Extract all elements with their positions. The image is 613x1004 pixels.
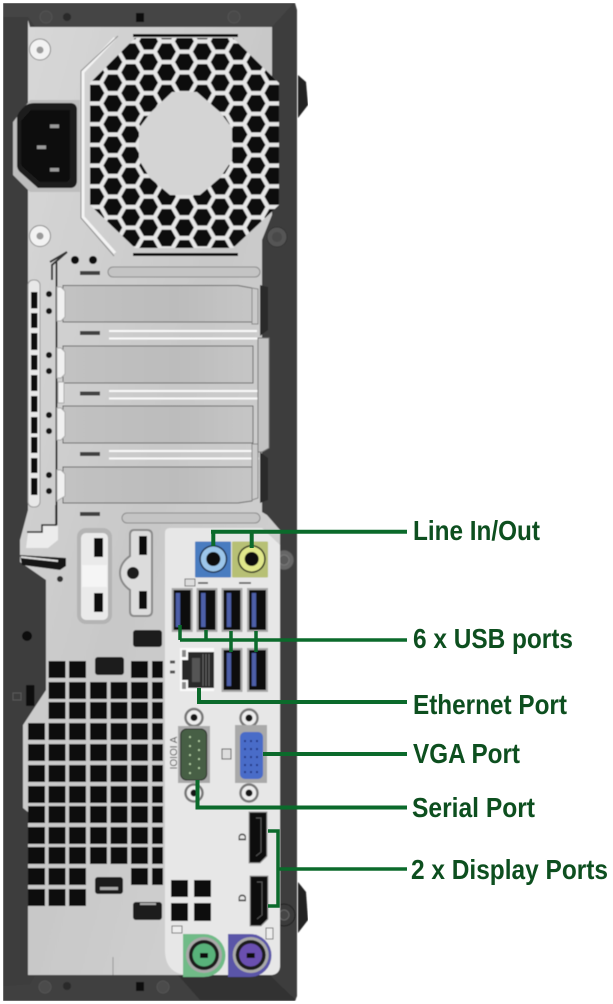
latch bottom step — [27, 505, 56, 532]
right side knob lower — [298, 882, 308, 933]
bay dividers — [109, 331, 259, 458]
display port lower — [237, 876, 268, 926]
computer chassis — [3, 3, 308, 1001]
rail slots — [31, 292, 38, 495]
right bracket dark ends — [260, 285, 268, 503]
rail vertical — [56, 262, 58, 525]
PS/2 green port — [172, 926, 226, 977]
bay 3 — [63, 406, 253, 443]
ethernet port — [170, 648, 214, 691]
bottom band fasteners — [39, 957, 296, 1000]
opening left — [77, 528, 112, 624]
bottom band — [3, 975, 200, 1000]
DP icon upper: D — [237, 833, 249, 841]
dark screw middle — [274, 550, 294, 570]
serial label: IOIOI A — [169, 736, 180, 769]
USB ports bottom row — [222, 649, 267, 691]
fan hub — [139, 92, 232, 195]
serial port — [169, 709, 210, 802]
expansion slot latch holes — [71, 256, 97, 264]
VGA icon — [222, 749, 231, 759]
callout: ethernet — [199, 688, 567, 720]
dark screw lower — [273, 904, 295, 926]
callout: USB ports: 6 x USB ports — [413, 623, 573, 654]
fan frame ridge — [83, 38, 115, 253]
ventilation grid — [28, 661, 163, 906]
side hook — [20, 555, 66, 582]
USB ports top row — [173, 589, 267, 631]
right bracket bar — [258, 338, 269, 452]
right bracket — [252, 288, 258, 500]
lower rail plate — [26, 526, 58, 548]
screw top — [30, 39, 50, 60]
metal back panel — [20, 20, 280, 975]
dark screw upper — [267, 227, 287, 247]
fan grille — [81, 36, 279, 256]
callout: ethernet: Ethernet Port — [413, 689, 567, 720]
display port upper — [237, 812, 267, 863]
audio green jack — [232, 542, 268, 578]
VGA port — [222, 710, 267, 802]
opening keyhole — [120, 530, 152, 616]
callout: display ports — [268, 831, 608, 906]
PS/2 purple port — [228, 928, 273, 977]
right side knob upper — [298, 75, 308, 118]
callout: USB ports — [180, 623, 573, 654]
callout: VGA: VGA Port — [413, 738, 520, 769]
DP icon lower: D — [237, 894, 249, 902]
small tabs — [80, 273, 100, 514]
bay 1 — [63, 286, 252, 322]
four square vents — [171, 880, 211, 921]
chassis dark body — [3, 3, 297, 1001]
callout: serial: Serial Port — [412, 792, 535, 823]
lock slot — [13, 685, 34, 706]
callout: line in/out — [211, 515, 540, 548]
white tabs — [57, 287, 65, 501]
fan frame slots — [133, 36, 238, 254]
power inlet — [13, 100, 80, 192]
USB icons — [185, 579, 251, 586]
rail dots — [46, 294, 52, 491]
screw middle — [30, 226, 50, 246]
callout: serial — [198, 780, 535, 823]
bay 2 — [63, 346, 253, 383]
bay 4 — [63, 467, 252, 503]
slot cutouts — [108, 267, 260, 277]
top band — [3, 4, 293, 27]
left retention rail — [26, 252, 67, 548]
expansion bays — [63, 267, 269, 523]
clip tabs — [95, 630, 162, 920]
latch top — [50, 252, 67, 280]
callout: line in/out: Line In/Out — [413, 515, 540, 546]
top band fasteners — [40, 11, 240, 23]
hexagon grille — [90, 38, 279, 248]
side hole — [22, 631, 32, 641]
audio blue jack — [195, 542, 231, 578]
I/O shield — [165, 528, 280, 975]
